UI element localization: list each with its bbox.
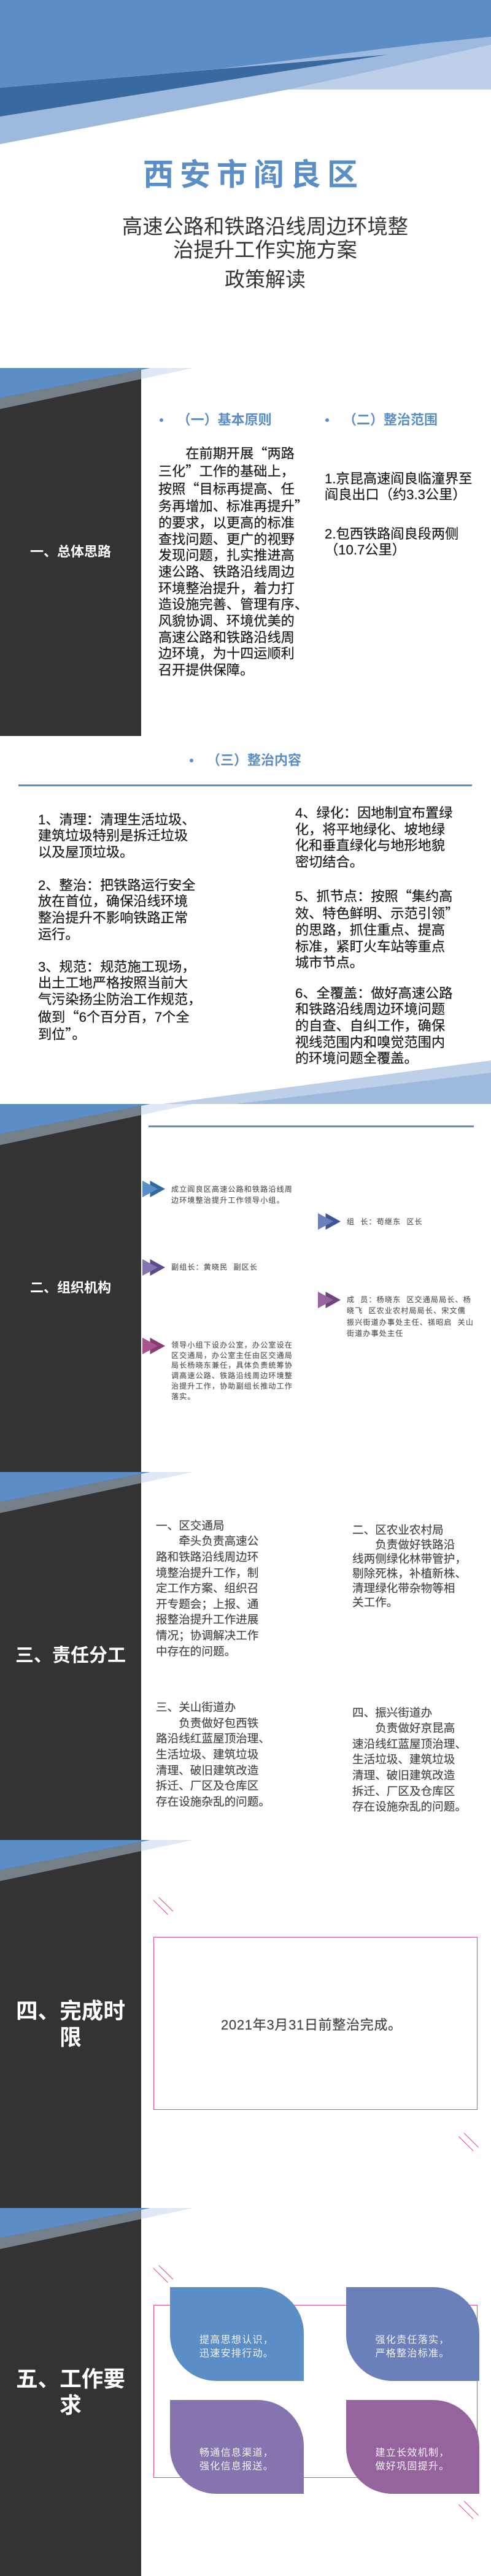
text: transport bureau: 开专题会；上报、通 bbox=[156, 1598, 258, 1611]
sidebar bbox=[0, 368, 141, 736]
text: leading group: 边环境整治提升工作领导小组。 bbox=[171, 1196, 285, 1205]
card: long-term mechanism bbox=[346, 2400, 479, 2494]
text: members: 振兴街道办事处主任、禚昭启 关山 bbox=[347, 1318, 474, 1327]
text: leading group: 成立阎良区高速公路和铁路沿线周 bbox=[171, 1185, 293, 1194]
section heading: 求 bbox=[60, 2393, 82, 2418]
text: transport bureau: 情况；协调解决工作 bbox=[156, 1629, 258, 1642]
text: agriculture bureau: 线两侧绿化林带管护， bbox=[352, 1552, 466, 1565]
text: scope 2 bbox=[325, 526, 458, 558]
section heading bbox=[0, 2366, 141, 2418]
text: basic principles: 务再增加、标准再提升” bbox=[158, 496, 308, 515]
icon: arrow 2 bbox=[318, 1213, 341, 1230]
text: item 5: 的思路，抓住重点、提高 bbox=[295, 922, 445, 938]
subtitle bbox=[122, 216, 408, 262]
subheading: remediation content: （三）整治内容 bbox=[207, 753, 301, 768]
text: item 3: 气污染扬尘防治工作规范， bbox=[38, 992, 201, 1007]
text: zhenxing office: 存在设施杂乱的问题。 bbox=[352, 1800, 466, 1813]
card: strengthen responsibility bbox=[346, 2287, 479, 2381]
section heading: 二、组织机构 bbox=[30, 1280, 111, 1295]
section heading: 四、完成时 bbox=[16, 1999, 125, 2023]
sidebar banner wedge bbox=[0, 1472, 193, 1513]
section heading: 三、责任分工 bbox=[15, 1646, 126, 1666]
text: office: 调高速公路、铁路沿线周边环境整 bbox=[171, 1371, 293, 1380]
subtitle: 治提升工作实施方案 bbox=[173, 239, 357, 262]
text: item 5 bbox=[295, 886, 458, 970]
text: item 5: 效、特色鲜明、示范引领” bbox=[295, 903, 458, 922]
text: guanshan office: 清理、破旧建筑改造 bbox=[156, 1764, 258, 1777]
text: item 4: 密切结合。 bbox=[295, 854, 363, 870]
text: zhenxing office: 速沿线红蓝屋顶治理、 bbox=[352, 1738, 466, 1750]
text: item 6: 和铁路沿线周边环境问题 bbox=[295, 1002, 445, 1017]
card: information channels bbox=[170, 2400, 303, 2494]
sidebar banner wedge bbox=[0, 2208, 193, 2249]
text: item 3: 出土工地严格按照当前大 bbox=[38, 975, 188, 991]
text: zhenxing office: 清理、破旧建筑改造 bbox=[352, 1769, 455, 1782]
text: deputy leader: 副组长：黄晓民 副区长 bbox=[171, 1263, 258, 1271]
text: guanshan office: 三、关山街道办 bbox=[156, 1701, 236, 1714]
text: transport bureau: 报整治提升工作进展 bbox=[156, 1613, 258, 1626]
section heading: 一、总体思路 bbox=[30, 544, 111, 559]
text: agriculture bureau: 负责做好铁路沿 bbox=[375, 1538, 455, 1551]
text: zhenxing office: 生活垃圾、建筑垃圾 bbox=[352, 1753, 455, 1766]
icon: arrow 4 bbox=[318, 1292, 341, 1308]
text: scope 1: 阎良出口（约3.3公里） bbox=[325, 487, 466, 502]
text: agriculture bureau: 剔除死株，补植新株、 bbox=[352, 1567, 466, 1580]
text: basic principles: 风貌协调、环境优美的 bbox=[158, 613, 295, 629]
card: information channels: 强化信息报送。 bbox=[199, 2461, 274, 2472]
text: item 1: 1、清理：清理生活垃圾、 bbox=[38, 812, 195, 827]
text: item 6: 6、全覆盖：做好高速公路 bbox=[295, 986, 452, 1001]
text: guanshan office: 负责做好包西铁 bbox=[179, 1717, 258, 1730]
card: raise awareness: 提高思想认识， bbox=[199, 2335, 274, 2345]
text: transport bureau: 一、区交通局 bbox=[156, 1519, 225, 1532]
text: transport bureau: 中存在的问题。 bbox=[156, 1645, 236, 1658]
card: long-term mechanism: 建立长效机制， bbox=[376, 2448, 450, 2458]
text: zhenxing office: 四、振兴街道办 bbox=[352, 1706, 432, 1719]
cover banner: layered blue wedges bbox=[0, 0, 491, 144]
text: item 3: 3、规范：规范施工现场， bbox=[38, 959, 195, 975]
text: scope 2: （10.7公里） bbox=[325, 542, 406, 558]
text: scope 1: 1.京昆高速阎良临潼界至 bbox=[325, 471, 472, 486]
text: item 3: 做到“6个百分百，7个全 bbox=[38, 1006, 190, 1026]
panel: section 2 organisation bbox=[0, 1104, 474, 1472]
card: long-term mechanism: 做好巩固提升。 bbox=[376, 2461, 450, 2472]
text: item 4 bbox=[295, 805, 452, 870]
text: transport bureau: 定工作方案、组织召 bbox=[156, 1582, 258, 1595]
text: agriculture bureau: 清理绿化带杂物等相 bbox=[352, 1582, 455, 1595]
card: strengthen responsibility: 严格整治标准。 bbox=[376, 2348, 450, 2359]
text: deadline: 2021年3月31日前整治完成。 bbox=[221, 2017, 402, 2033]
panel: section 5 work requirements bbox=[0, 2208, 479, 2576]
sidebar banner wedge bbox=[0, 1104, 193, 1145]
text: office: 落实。 bbox=[171, 1392, 196, 1401]
text: agriculture bureau bbox=[352, 1524, 466, 1609]
text: basic principles: 边环境，为十四运顺利 bbox=[158, 646, 295, 661]
icon: arrow 3 bbox=[142, 1259, 165, 1276]
text: members: 成 员：杨晓东 区交通局局长、杨 bbox=[347, 1295, 471, 1304]
text: guanshan office: 路沿线红蓝屋顶治理、 bbox=[156, 1732, 270, 1745]
subheading: basic principles: （一）基本原则 bbox=[177, 412, 272, 427]
text: item 5: 5、抓节点：按照“集约高 bbox=[295, 886, 452, 905]
sidebar bbox=[0, 1840, 141, 2208]
text: office bbox=[171, 1341, 293, 1401]
text: item 1: 建筑垃圾特别是拆迁垃圾 bbox=[38, 828, 188, 843]
subheading: scope: （二）整治范围 bbox=[343, 412, 438, 427]
sidebar bbox=[0, 1472, 141, 1840]
panel: section 3 responsibilities bbox=[0, 1472, 466, 1840]
text: office: 治提升工作，协助副组长推动工作 bbox=[171, 1382, 293, 1390]
text: basic principles: 召开提供保障。 bbox=[158, 662, 253, 678]
text: zhenxing office: 拆迁、厂区及仓库区 bbox=[352, 1785, 455, 1798]
text: item 5: 标准，紧盯火车站等重点 bbox=[295, 939, 445, 954]
title: 西安市阎良区 bbox=[143, 158, 364, 192]
text: item 4: 化和垂直绿化与地形地貌 bbox=[295, 838, 445, 853]
icon: arrow 5 bbox=[142, 1338, 165, 1354]
text: item 3 bbox=[38, 959, 201, 1043]
text: item 4: 化，将平地绿化、坡地绿 bbox=[295, 822, 445, 837]
text: basic principles: 的要求，以更高的标准 bbox=[158, 515, 295, 531]
section heading: 限 bbox=[60, 2025, 82, 2050]
card: strengthen responsibility: 强化责任落实， bbox=[376, 2335, 450, 2345]
text: group leader: 组 长：苟继东 区长 bbox=[347, 1217, 423, 1226]
sidebar bbox=[0, 1104, 141, 1472]
text: agriculture bureau: 关工作。 bbox=[352, 1596, 398, 1609]
text: basic principles: 速公路、铁路沿线周边 bbox=[158, 564, 295, 580]
text: zhenxing office bbox=[352, 1706, 466, 1813]
text: item 2: 整治提升不影响铁路正常 bbox=[38, 910, 188, 926]
text: item 4: 4、绿化：因地制宜布置绿 bbox=[295, 805, 452, 821]
text: item 1: 以及屋顶垃圾。 bbox=[38, 845, 133, 860]
text: guanshan office: 拆迁、厂区及仓库区 bbox=[156, 1779, 258, 1792]
text: item 6: 的自查、自纠工作，确保 bbox=[295, 1018, 445, 1033]
text: basic principles bbox=[158, 443, 308, 678]
text: item 2: 放在首位，确保沿线环境 bbox=[38, 894, 188, 909]
text: basic principles: 造设施完善、管理有序、 bbox=[158, 597, 308, 612]
text: item 2 bbox=[38, 877, 195, 942]
card: information channels: 畅通信息渠道， bbox=[199, 2448, 274, 2458]
text: transport bureau: 路和铁路沿线周边环 bbox=[156, 1551, 258, 1563]
text: office: 局长杨晓东兼任，具体负责统筹协 bbox=[171, 1361, 293, 1370]
text: basic principles: 按照“目标再提高、任 bbox=[158, 478, 295, 498]
text: item 2: 2、整治：把铁路运行安全 bbox=[38, 877, 195, 893]
text: item 1 bbox=[38, 812, 195, 860]
subtitle: 高速公路和铁路沿线周边环境整 bbox=[122, 216, 408, 239]
sidebar banner wedge bbox=[0, 1840, 193, 1881]
text: item 2: 运行。 bbox=[38, 927, 79, 942]
text: transport bureau: 境整治提升工作，制 bbox=[156, 1566, 258, 1579]
panel: cover bbox=[0, 0, 491, 291]
text: guanshan office: 生活垃圾、建筑垃圾 bbox=[156, 1748, 258, 1761]
section heading bbox=[16, 1999, 125, 2050]
text: leading group bbox=[171, 1185, 293, 1205]
icon: arrow 1 bbox=[142, 1181, 165, 1197]
frame behind cards bbox=[153, 2305, 477, 2478]
subtitle: policy interpretation: 政策解读 bbox=[225, 268, 306, 291]
sidebar bbox=[0, 2208, 141, 2576]
text: guanshan office: 存在设施杂乱的问题。 bbox=[156, 1795, 270, 1808]
text: scope 1 bbox=[325, 471, 472, 502]
section heading: 五、工作要 bbox=[16, 2367, 125, 2391]
card: raise awareness: 迅速安排行动。 bbox=[199, 2348, 274, 2359]
text: item 6: 的环境问题全覆盖。 bbox=[295, 1051, 418, 1066]
panel: section 1 overall approach bbox=[0, 368, 472, 736]
text: item 6: 视线范围内和嗅觉范围内 bbox=[295, 1035, 445, 1050]
text: guanshan office bbox=[156, 1701, 270, 1808]
pink frame bbox=[153, 1937, 477, 2110]
text: agriculture bureau: 二、区农业农村局 bbox=[352, 1524, 444, 1536]
rule and bottom wedges bbox=[18, 784, 491, 1104]
text: office: 区交通局，办公室主任由区交通局 bbox=[171, 1351, 293, 1360]
text: members bbox=[347, 1295, 474, 1338]
text: basic principles: 高速公路和铁路沿线周 bbox=[158, 630, 295, 645]
panel: remediation content bbox=[18, 753, 491, 1104]
text: basic principles: 查找问题、更广的视野 bbox=[158, 532, 295, 547]
text: item 5: 城市节点。 bbox=[295, 955, 363, 970]
panel: section 4 deadline bbox=[0, 1840, 479, 2208]
sidebar banner wedge bbox=[0, 368, 193, 409]
text: basic principles: 环境整治提升，着力打 bbox=[158, 581, 295, 596]
text: transport bureau bbox=[156, 1519, 258, 1658]
text: transport bureau: 牵头负责高速公 bbox=[179, 1535, 258, 1547]
text: office: 领导小组下设办公室，办公室设在 bbox=[171, 1341, 293, 1349]
text: basic principles: 在前期开展“两路 bbox=[185, 443, 295, 462]
text: item 6 bbox=[295, 986, 452, 1066]
text: zhenxing office: 负责做好京昆高 bbox=[375, 1722, 455, 1735]
text: item 3: 到位”。 bbox=[38, 1024, 86, 1043]
text: basic principles: 发现问题，扎实推进高 bbox=[158, 548, 295, 563]
text: scope 2: 2.包西铁路阎良段两侧 bbox=[325, 526, 458, 542]
card: raise awareness bbox=[170, 2287, 303, 2381]
text: members: 街道办事处主任 bbox=[347, 1329, 403, 1338]
text: members: 晓飞 区农业农村局局长、宋文儒 bbox=[347, 1306, 466, 1315]
text: basic principles: 三化”工作的基础上， bbox=[158, 461, 295, 480]
